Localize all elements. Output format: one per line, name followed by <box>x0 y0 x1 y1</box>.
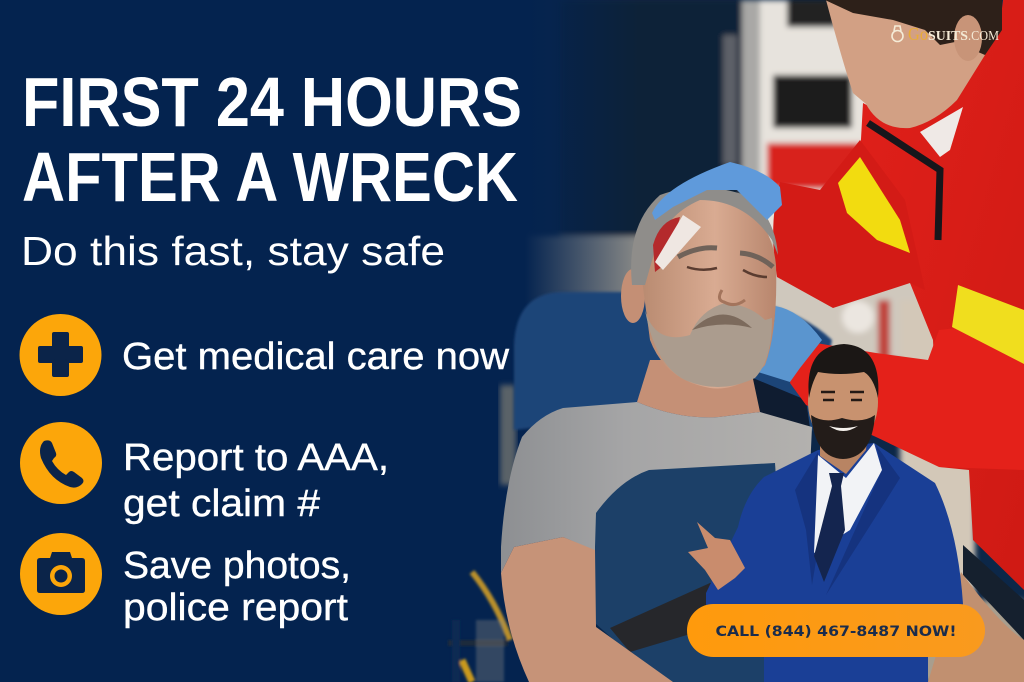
head <box>640 193 776 389</box>
logo: .COM <box>968 29 999 44</box>
closed eyes <box>687 267 767 277</box>
shirt <box>814 443 882 553</box>
CTA pill: CALL (844) 467-8487 NOW! <box>716 624 956 640</box>
nose <box>719 290 745 305</box>
jacket dark placket <box>868 123 940 240</box>
step 3 <box>20 533 362 629</box>
step 2: Report to AAA, <box>123 437 389 479</box>
paramedic ear <box>954 15 982 61</box>
title <box>22 63 522 216</box>
CTA pill <box>687 604 985 657</box>
title: FIRST 24 HOURS <box>22 63 522 141</box>
left navy panel <box>0 0 640 682</box>
eyes and brows <box>821 392 864 400</box>
step 2 <box>20 422 400 525</box>
stretcher side strip <box>500 385 516 485</box>
icon: medical cross <box>20 314 102 396</box>
upper sleeve <box>773 140 925 308</box>
grey hair <box>631 188 778 285</box>
paramedic face <box>826 0 1002 128</box>
patient t-shirt <box>501 402 812 682</box>
glove under head <box>758 306 822 382</box>
head wound and bandage <box>653 215 701 272</box>
shirt collar <box>920 107 963 157</box>
reflective sleeve stripe <box>838 157 910 253</box>
smile <box>829 426 858 431</box>
step 2: get claim # <box>123 483 320 525</box>
lower arm <box>790 320 1024 470</box>
beard <box>645 303 772 387</box>
forearm skin and trousers <box>928 545 1024 682</box>
beard <box>811 415 875 459</box>
logo <box>892 24 999 44</box>
eyebrows <box>678 248 773 267</box>
gesturing hand <box>688 522 745 590</box>
ear <box>621 269 645 323</box>
reflective body stripe <box>952 285 1024 364</box>
patient arm <box>501 537 673 682</box>
neck <box>637 360 760 417</box>
suit <box>706 443 963 682</box>
suit lapels and fold shading <box>795 445 900 595</box>
logo: SUITS <box>928 29 968 44</box>
step 1: Get medical care now <box>122 336 510 378</box>
logo: Go <box>908 24 928 44</box>
stretcher frame <box>448 572 510 682</box>
moustache <box>692 314 752 330</box>
paramedic <box>758 0 1024 682</box>
step 3: Save photos, <box>123 545 351 587</box>
shirt navy panel <box>595 463 790 682</box>
title: AFTER A WRECK <box>22 138 518 216</box>
glove on head <box>652 162 782 220</box>
attorney <box>688 344 963 682</box>
neck <box>820 430 868 474</box>
dark gap beside neck <box>748 376 810 428</box>
step 3: police report <box>123 587 348 629</box>
subtitle: Do this fast, stay safe <box>21 228 445 274</box>
step 1 <box>20 314 510 396</box>
paramedic hair <box>825 0 1002 55</box>
tie <box>814 473 845 582</box>
hair <box>808 344 878 398</box>
logo icon <box>892 26 903 42</box>
icon: phone <box>20 422 102 504</box>
belt strap <box>610 580 764 652</box>
face <box>808 356 878 448</box>
stretcher pillow <box>514 292 832 430</box>
paramedic jacket body and hood <box>860 0 1024 590</box>
patient <box>501 162 812 682</box>
icon: camera <box>20 533 102 615</box>
lower-left navy fade <box>0 300 470 682</box>
